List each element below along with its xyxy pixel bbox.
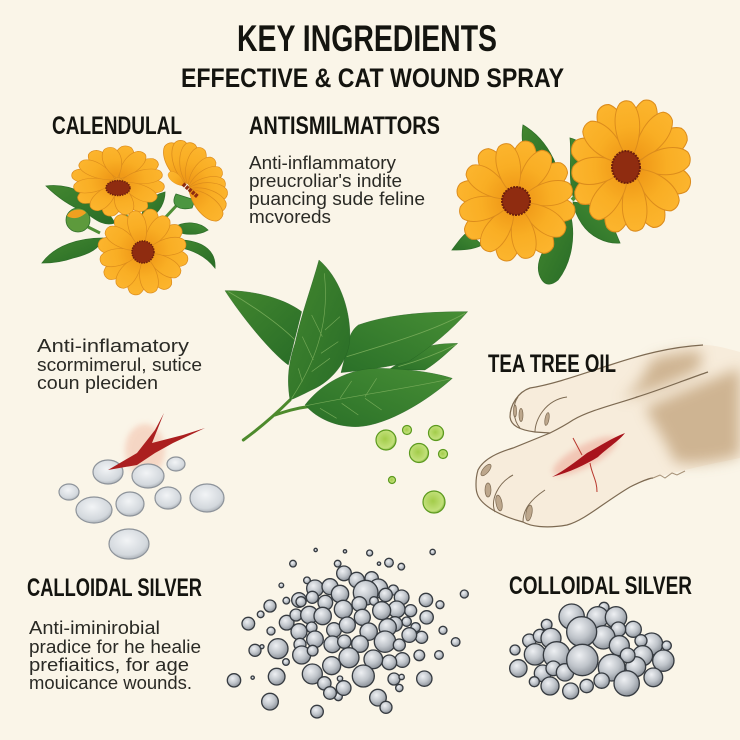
leaf: right upper: [341, 312, 468, 373]
wound: [548, 429, 622, 483]
text block: calendula description: puancing sude feline: [249, 188, 425, 209]
text block: antimicrobial left: Anti-iminirobial: [29, 617, 160, 638]
text block: calendula description: preucroliar's indite: [249, 170, 402, 191]
wound: [108, 413, 205, 470]
text block: calendula description: mcvoreds: [249, 206, 331, 227]
illustration: calendula cluster left: [42, 139, 230, 296]
flower: side-on: [159, 139, 230, 226]
heading: tea tree oil: TEA TREE OIL: [488, 350, 616, 378]
heading: colloidal silver left: CALLOIDAL SILVER: [27, 574, 202, 602]
leaf: center: [288, 260, 350, 400]
text block: anti-inflammatory left: [37, 335, 202, 393]
subtitle: EFFECTIVE & CAT WOUND SPRAY: [181, 63, 564, 93]
text block: antimicrobial left: pradice for he healie: [29, 636, 201, 657]
stem: [243, 400, 308, 440]
heading: calendula: CALENDULAL: [52, 112, 182, 140]
text block: antimicrobial left: [29, 617, 201, 693]
text block: anti-inflammatory left: Anti-inflamatory: [37, 335, 190, 356]
text block: anti-inflammatory left: scormimerul, sutice: [37, 354, 202, 375]
text block: antimicrobial left: prefiaitics, for age: [29, 654, 189, 675]
illustration: calendula cluster right: [452, 90, 701, 284]
illustration: wound with silver droplets: [59, 413, 224, 559]
paw outlines: [510, 345, 708, 433]
text block: antimicrobial left: mouicance wounds.: [29, 672, 192, 693]
text block: anti-inflammatory left: coun pleciden: [37, 372, 158, 393]
heading: antimicrobial: ANTISMILMATTORS: [249, 112, 440, 140]
illustration: green oil drops: [376, 426, 448, 513]
leaf: back left: [225, 291, 302, 365]
illustration: cat paws with wound: [476, 345, 740, 527]
fur patches: [620, 351, 740, 463]
illustration: silver pile right: [510, 602, 674, 699]
text block: calendula description: [249, 152, 425, 227]
text block: calendula description: Anti-inflammatory: [249, 152, 397, 173]
leaf: lower: [305, 368, 452, 427]
title: KEY INGREDIENTS: [237, 18, 497, 59]
leaf: right middle: [388, 343, 458, 370]
illustration: silver pile center: [227, 548, 468, 718]
illustration: green leaves: [225, 260, 468, 440]
